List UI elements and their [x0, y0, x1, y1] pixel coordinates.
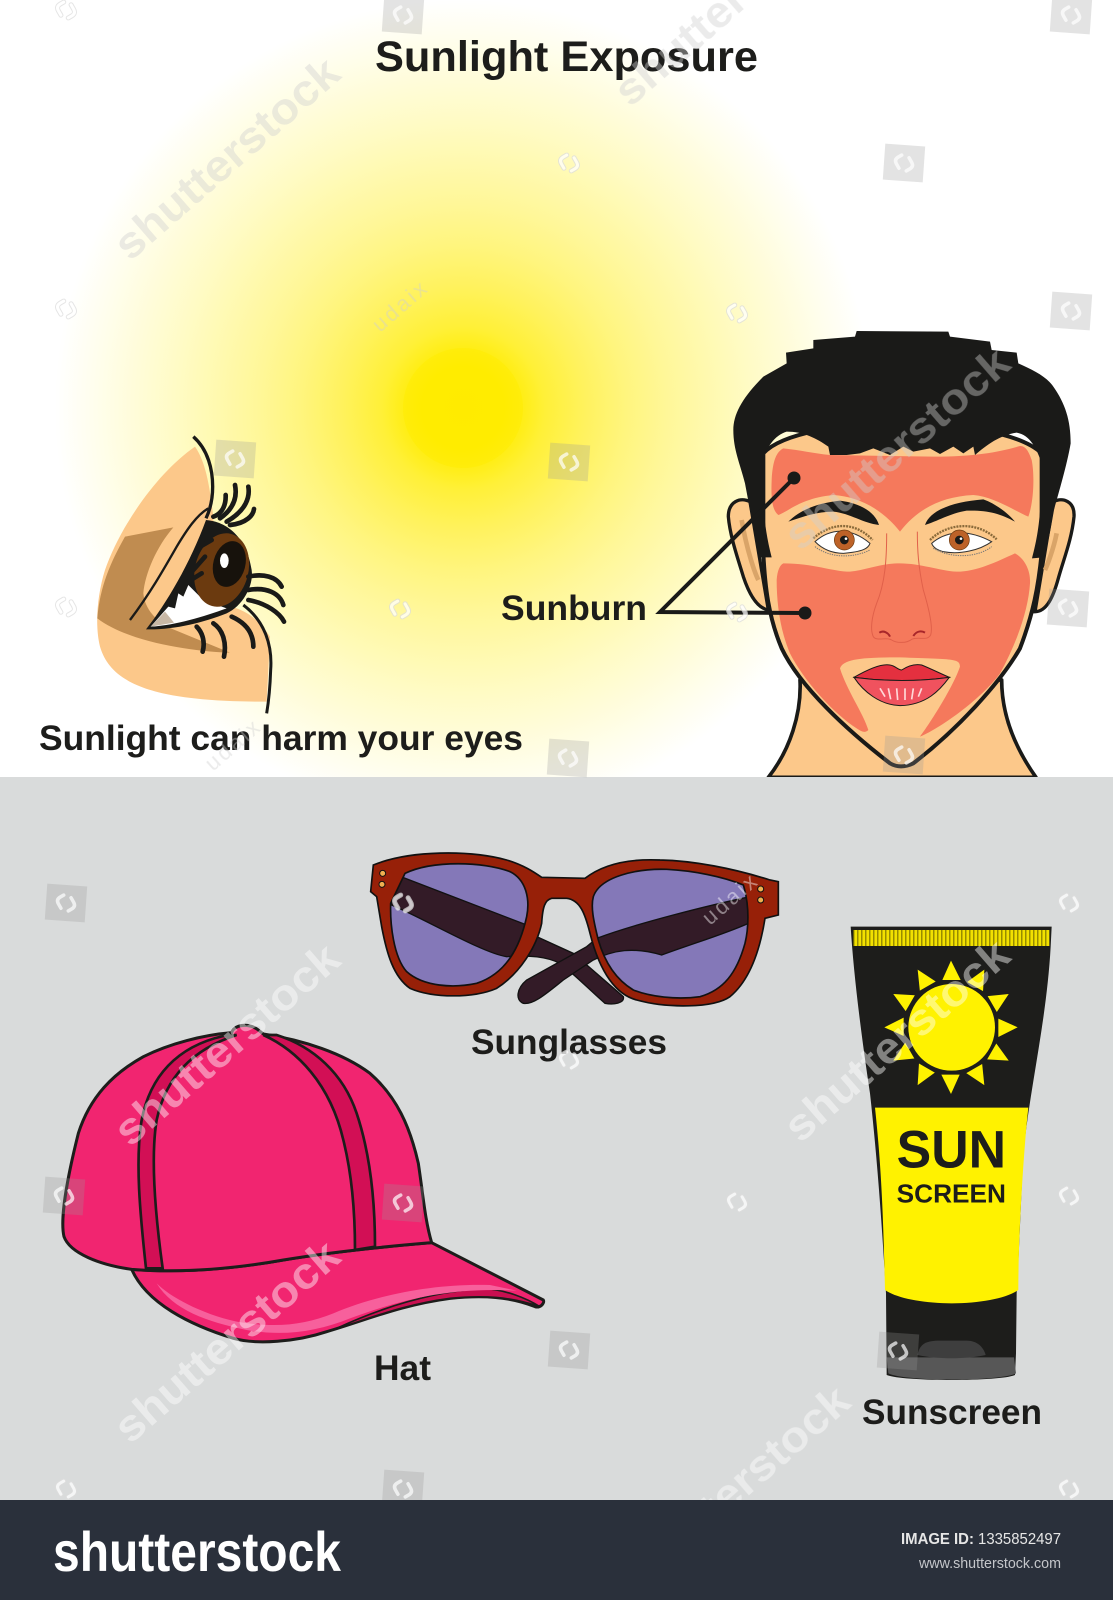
icon: sunscreen tube: SCREEN	[897, 1179, 1006, 1209]
watermarks: shutterstock	[104, 47, 350, 270]
icon: sunscreen tube: SUN	[897, 1120, 1006, 1179]
face with sunburn areas	[728, 331, 1074, 777]
sunburn cheeks and nose	[777, 553, 1030, 737]
icon: pink baseball cap	[63, 1025, 544, 1342]
footer logo: shutterstock	[53, 1520, 342, 1583]
lower grey panel	[0, 777, 1113, 1500]
callout: sunburn pointer lines	[660, 472, 812, 620]
ears	[728, 500, 768, 610]
neck	[768, 680, 1036, 777]
hat label: Hat	[374, 1348, 431, 1388]
footer image id: IMAGE ID: 1335852497	[901, 1531, 1061, 1548]
watermarks: shutterstock	[774, 337, 1020, 560]
hair	[733, 331, 1071, 558]
sunglasses label: Sunglasses	[471, 1022, 667, 1062]
watermarks: shutterstock	[774, 929, 1020, 1152]
background: white upper panel	[0, 0, 1113, 777]
lips	[854, 665, 949, 681]
nose	[872, 532, 931, 642]
sunscreen label: Sunscreen	[862, 1392, 1042, 1432]
sunburn label: Sunburn	[501, 588, 647, 628]
sunburn forehead	[771, 446, 1033, 532]
footer bar	[0, 1500, 1113, 1600]
title: Sunlight Exposure	[375, 33, 758, 81]
watermarks: udaix	[367, 276, 432, 337]
icon: sunscreen tube	[851, 927, 1052, 1380]
watermarks: shutterstock	[104, 1230, 350, 1453]
icon: sunglasses	[371, 853, 778, 1006]
eyes	[815, 531, 870, 553]
watermarks: shutterstock	[614, 1375, 860, 1598]
watermarks: udaix	[200, 715, 265, 776]
footer website: www.shutterstock.com	[918, 1555, 1061, 1572]
watermarks: shutterstock	[104, 933, 350, 1156]
eye caption: Sunlight can harm your eyes	[39, 718, 523, 758]
head skin	[763, 423, 1042, 766]
watermarks: udaix	[697, 869, 762, 930]
eyebrows	[788, 501, 879, 525]
sun glow	[72, 18, 846, 777]
icon: human eye side view	[97, 437, 284, 713]
